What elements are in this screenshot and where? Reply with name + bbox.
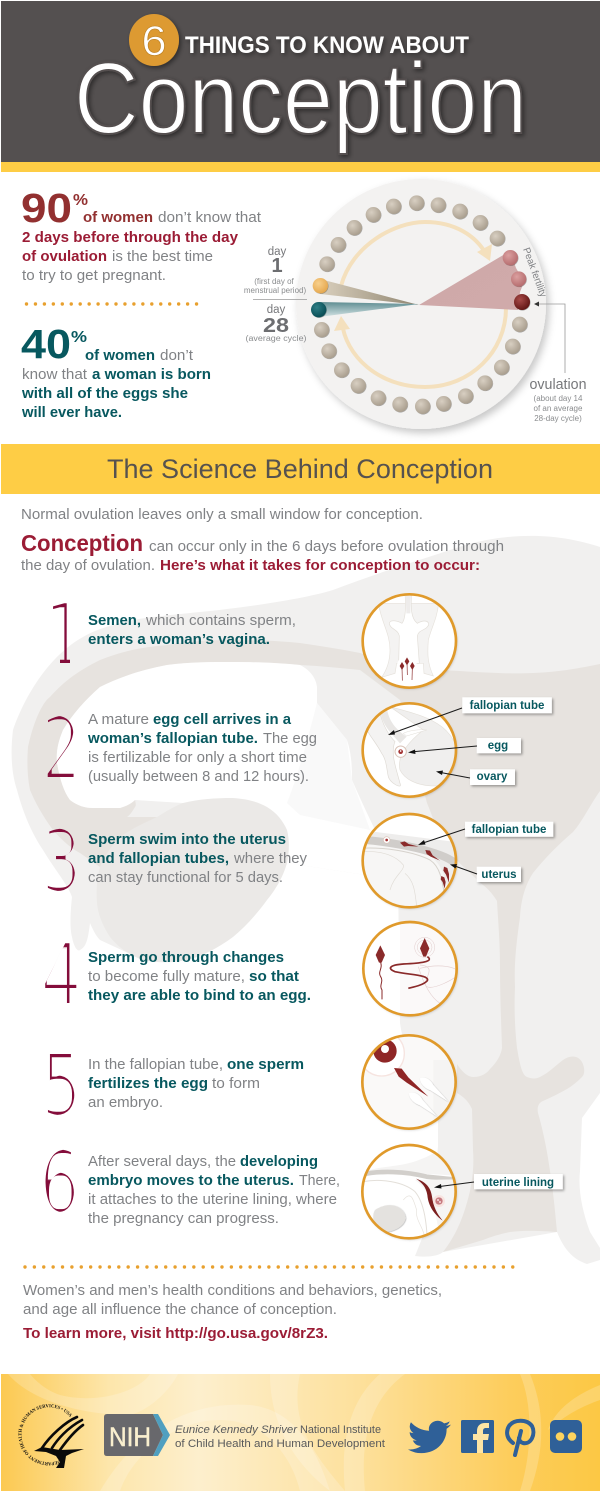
step 6 text: After several days, the: [88, 1153, 236, 1170]
step 2 text: The egg: [263, 730, 317, 747]
statistic: 40 percent: with all of the eggs she: [21, 385, 188, 402]
step 6 text: [88, 1153, 340, 1227]
section banner: [1, 444, 600, 494]
label: ovulation: (about day 14: [534, 394, 583, 403]
statistic: 90 percent: is the best time: [112, 248, 213, 265]
statistic: 90 percent: of women: [83, 209, 153, 226]
illustration 5: fertilization: [361, 1034, 458, 1131]
numeral 3: 3: [41, 811, 82, 913]
statistic: 90 percent: %: [73, 192, 88, 209]
statistic: 90 percent: 90: [21, 185, 72, 231]
closing text: [23, 1282, 442, 1342]
day 28 wedge: [319, 302, 419, 317]
statistic: 40 percent: of women: [85, 347, 155, 364]
label: day 1: [244, 246, 306, 295]
step 1 text: which contains sperm,: [145, 612, 296, 629]
fertile window wedge: [419, 251, 524, 310]
step 3 text: where they: [233, 850, 307, 867]
label: day 1: menstrual period): [244, 286, 306, 295]
step 4 text: so that: [249, 968, 299, 985]
callout: uterus: [450, 864, 521, 882]
step 6 text: developing: [240, 1153, 318, 1170]
title word: Conception: [74, 43, 527, 155]
step 4 text: Sperm go through changes: [88, 949, 284, 966]
number badge: [129, 14, 179, 66]
intro text: Normal ovulation leaves only a small window for conception.: [21, 506, 423, 523]
intro text: the day of ovulation.: [21, 557, 155, 574]
step 3: [41, 811, 307, 913]
statistic: 90 percent: to try to get pregnant.: [22, 267, 166, 284]
institute name: Eunice Kennedy Shriver: [175, 1424, 298, 1436]
callout: fallopian tube upper uterus: [418, 822, 553, 845]
institute name: of Child Health and Human Development: [175, 1438, 385, 1450]
label: ovulation: of an average: [534, 404, 583, 413]
dial disc: [296, 179, 546, 429]
callout: uterine lining: [434, 1174, 563, 1189]
label: day 28: day: [267, 304, 286, 316]
icon: Pinterest: [507, 1421, 533, 1455]
title: [74, 14, 527, 155]
step 1 text: Semen,: [88, 612, 141, 629]
header yellow stripe: [1, 162, 600, 172]
step 6 text: the pregnancy can progress.: [88, 1210, 279, 1227]
title line 1: THINGS TO KNOW ABOUT: [185, 32, 469, 59]
statistic: 90 percent: 2 days before through the day: [22, 229, 239, 246]
illustration 1: semen entering vagina: [363, 593, 456, 688]
intro text: Here’s what it takes for conception to occur:: [160, 557, 480, 574]
label: day 1: day: [268, 246, 287, 258]
step 2 text: egg cell arrives in a: [153, 711, 292, 728]
label: ovulation: ovulation: [530, 377, 586, 393]
chart: 28-day cycle dial: [296, 179, 565, 429]
step 3 text: [88, 831, 307, 886]
step 6 text: it attaches to the uterine lining, where: [88, 1191, 337, 1208]
label: day 1: (first day of: [254, 277, 295, 286]
dotted divider: statistics: [26, 302, 197, 306]
callout: ovary: ovary: [477, 771, 508, 783]
numeral 2: 2: [41, 698, 82, 800]
numeral 1: 1: [44, 584, 85, 686]
number badge: 6: [142, 17, 166, 64]
institute name: [175, 1424, 385, 1450]
label: day 1: 1: [271, 255, 283, 277]
step 5 text: fertilizes the egg: [88, 1075, 208, 1092]
statistic: 40 percent: 40: [21, 321, 71, 367]
callout: ovary: [436, 769, 515, 785]
illustration 3: sperm in fallopian tube and uterus: [361, 812, 458, 910]
statistic: 40 percent: [21, 321, 211, 421]
callout: uterus: uterus: [481, 869, 517, 881]
logo: HHS seal: DEPARTMENT OF HEALTH & HUMAN SERVICES • USA: [18, 1404, 72, 1466]
callout: fallopian tube: [388, 697, 552, 735]
label: ovulation: [530, 377, 586, 423]
statistic: 90 percent: of ovulation: [22, 248, 107, 265]
dotted divider: closing: [25, 1265, 513, 1269]
label: day 28: [246, 304, 307, 343]
step 5 text: one sperm: [227, 1056, 304, 1073]
illustration 4: sperm maturing: [363, 920, 460, 1020]
statistic: 90 percent: don’t know that: [158, 209, 262, 226]
callout: fallopian tube upper uterus: fallopian tube: [472, 824, 546, 836]
step 1: [53, 603, 295, 663]
statistic: 90 percent: [21, 185, 262, 284]
step 4 text: they are able to bind to an egg.: [88, 987, 311, 1004]
step 2 text: is fertilizable for only a short time: [88, 749, 307, 766]
intro text: can occur only in the 6 days before ovulation through: [149, 538, 504, 555]
divider: day labels: [253, 298, 307, 300]
step 3 text: can stay functional for 5 days.: [88, 869, 283, 886]
step 2 text: woman’s fallopian tube.: [87, 730, 258, 747]
footer band: [1, 1374, 600, 1491]
label: ovulation: 28-day cycle): [534, 414, 582, 423]
cycle beads: [311, 195, 530, 414]
step 1 text: enters a woman’s vagina.: [88, 631, 270, 648]
numeral 6: 6: [39, 1132, 80, 1234]
step 5 text: In the fallopian tube,: [88, 1056, 223, 1073]
callout: fallopian tube: fallopian tube: [470, 700, 544, 712]
callout: egg: egg: [488, 740, 508, 752]
step 2: [41, 698, 317, 800]
step 2 text: [87, 711, 317, 785]
numeral 4: 4: [40, 924, 82, 1026]
icon: Twitter: [408, 1421, 451, 1453]
statistic: 40 percent: a woman is born: [92, 366, 211, 383]
background illustration: uterus silhouette: [12, 536, 600, 1264]
step 2 text: A mature: [88, 711, 149, 728]
statistic: 40 percent: will ever have.: [21, 404, 122, 421]
statistic: 40 percent: don’t: [160, 347, 194, 364]
cycle arrows: [334, 222, 506, 387]
numeral 5: 5: [41, 1035, 82, 1137]
step 6 text: embryo moves to the uterus.: [88, 1172, 294, 1189]
statistic: 40 percent: %: [71, 329, 87, 346]
illustration 6: embryo at uterine lining: [360, 1145, 460, 1240]
logo: NIH: [104, 1414, 170, 1456]
step 4 text: to become fully mature,: [88, 968, 245, 985]
icon: Flickr: [550, 1420, 582, 1453]
closing text: Women’s and men’s health conditions and behaviors, genetics,: [23, 1282, 442, 1299]
label: day 28: (average cycle): [246, 334, 307, 343]
step 4: [40, 924, 311, 1026]
step 5: [41, 1035, 304, 1137]
ovulation pointer: [534, 302, 565, 373]
step 3 text: Sperm swim into the uterus: [88, 831, 286, 848]
callout: uterine lining: uterine lining: [482, 1177, 554, 1189]
callout: egg: [408, 738, 521, 754]
intro text: Conception: [21, 530, 143, 556]
closing text: and age all influence the chance of conception.: [23, 1301, 337, 1318]
section heading: The Science Behind Conception: [107, 454, 493, 484]
step 4 text: [88, 949, 311, 1004]
institute name: National Institute: [300, 1424, 381, 1436]
link line: To learn more, visit http://go.usa.gov/8rZ3.: [23, 1325, 328, 1342]
icon: Facebook: [461, 1420, 494, 1453]
statistic: 40 percent: know that: [22, 366, 88, 383]
step 5 text: to form: [212, 1075, 260, 1092]
step 2 text: (usually between 8 and 12 hours).: [88, 768, 309, 785]
step 5 text: an embryo.: [88, 1094, 163, 1111]
day 1 wedge: [320, 279, 419, 305]
header band: [1, 1, 600, 172]
step 3 text: and fallopian tubes,: [88, 850, 229, 867]
label: day 28: 28: [263, 315, 289, 337]
illustration 2: egg in fallopian tube: [363, 703, 460, 797]
logo: NIH: NIH: [109, 1422, 151, 1452]
step 6: [39, 1132, 340, 1234]
step 5 text: [88, 1056, 304, 1111]
step 6 text: There,: [299, 1172, 340, 1189]
label: peak fertility: Peak fertility: [520, 246, 548, 299]
step 1 text: [88, 612, 296, 648]
intro text: [21, 506, 504, 574]
